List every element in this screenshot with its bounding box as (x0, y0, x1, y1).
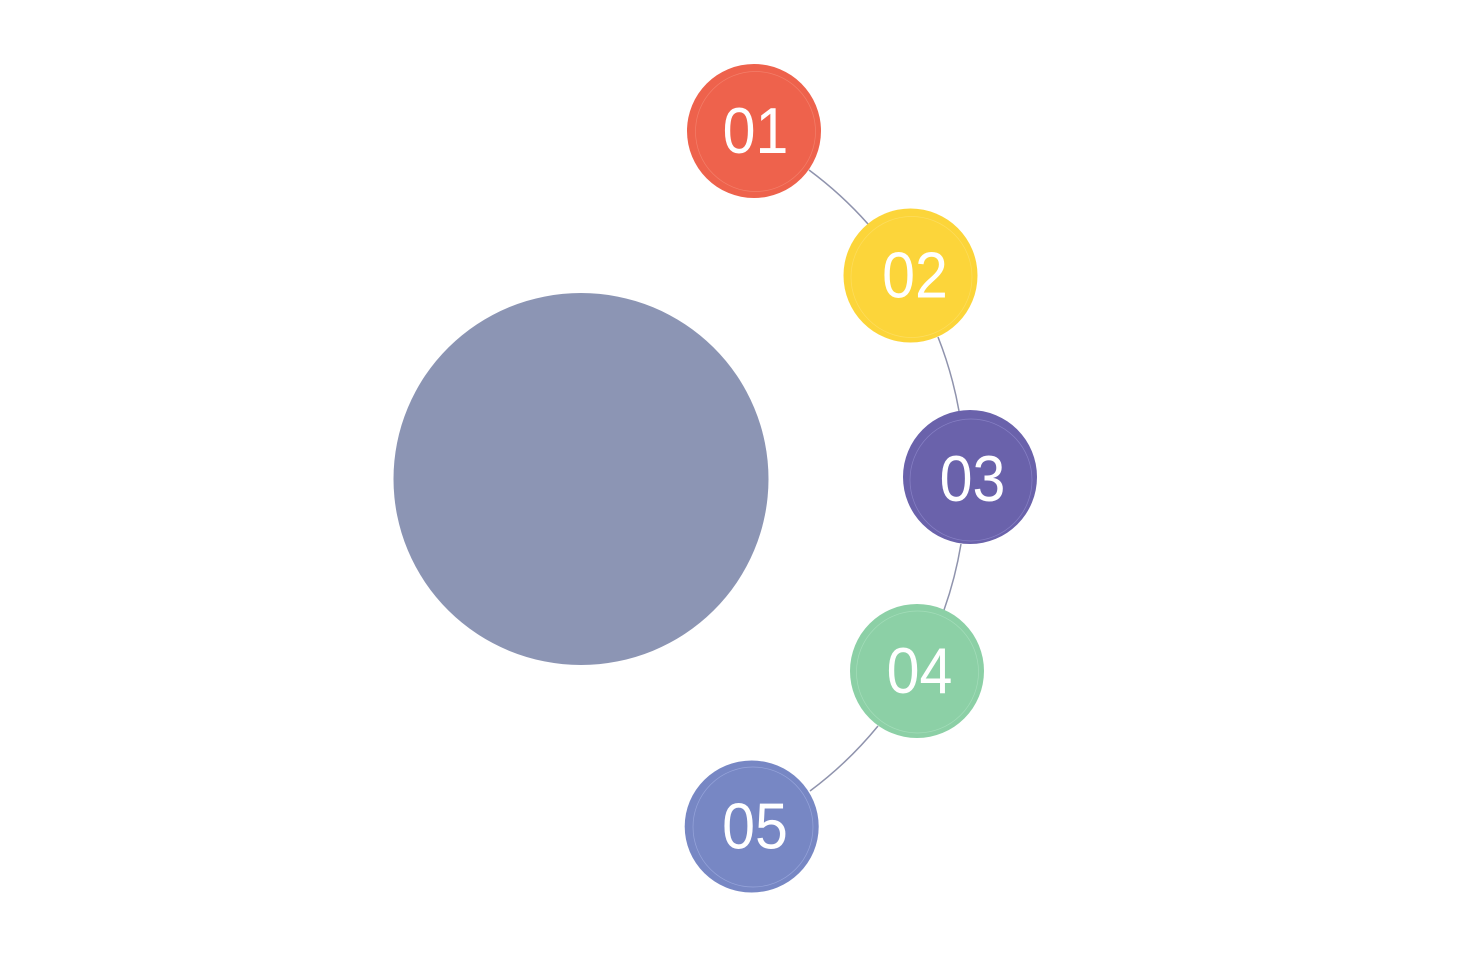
step 02 badge: 02 (882, 240, 948, 312)
step 02 badge (844, 208, 978, 342)
connector: 02 to 03 (938, 337, 959, 411)
connector: 03 to 04 (944, 544, 961, 610)
connector: 01 to 02 (809, 170, 868, 224)
step 04 badge (850, 604, 984, 738)
step 01 badge (687, 64, 821, 198)
step 03 badge (903, 410, 1037, 544)
step 04 badge: 04 (887, 635, 952, 708)
step 03 badge: 03 (940, 443, 1005, 516)
step 05 badge: 05 (722, 791, 788, 863)
central circle (394, 293, 768, 665)
connector: 04 to 05 (810, 726, 878, 791)
step 01 badge: 01 (723, 95, 788, 168)
step 05 badge (685, 760, 819, 892)
